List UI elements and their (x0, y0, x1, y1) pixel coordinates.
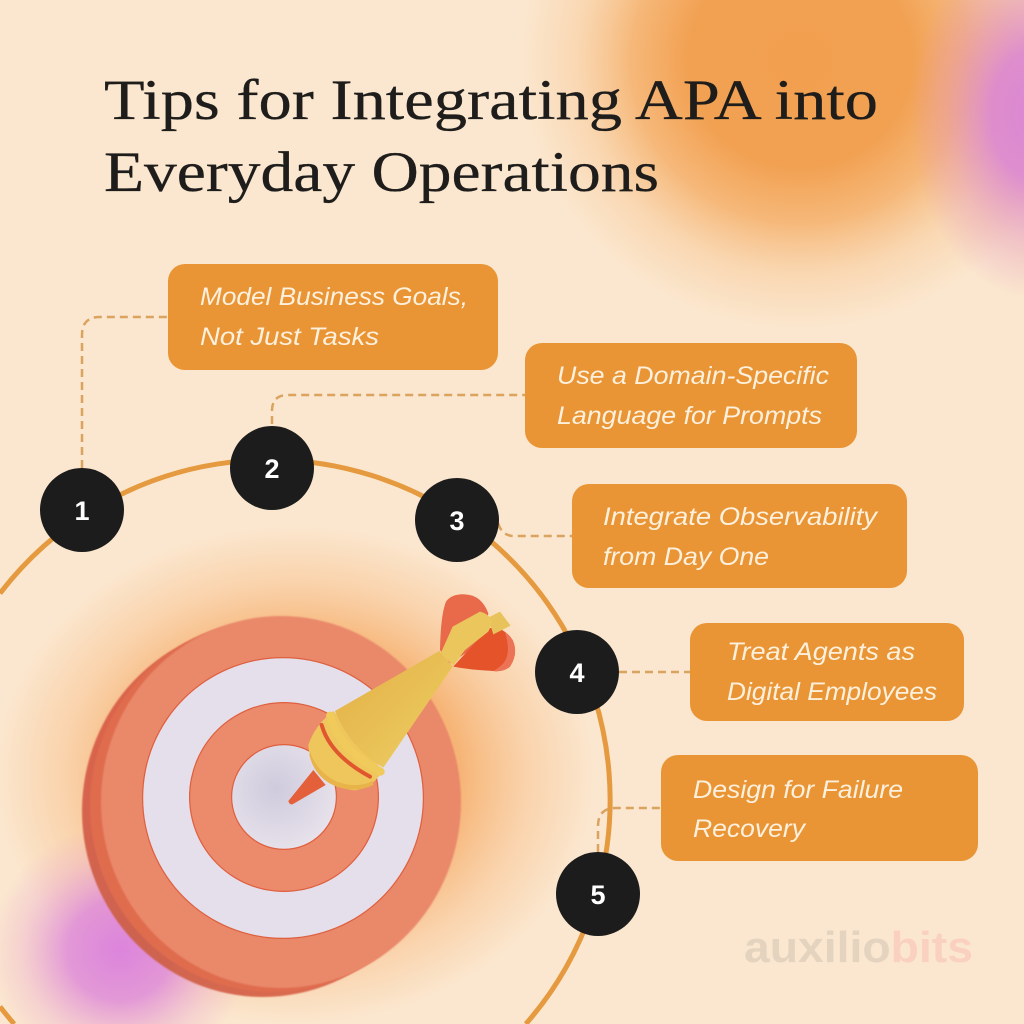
dashed connectors (82, 317, 690, 852)
panel: step 5: Recovery (693, 815, 807, 843)
badge 1: 1 (74, 496, 90, 526)
badge 2: 2 (264, 454, 280, 484)
panel: step 4: Digital Employees (727, 678, 937, 706)
title: Everyday Operations (104, 141, 659, 204)
panel: step 5: Design for Failure (693, 776, 903, 804)
badge 4: 4 (569, 658, 585, 688)
dartboard (82, 616, 461, 997)
watermark logo: auxiliobits (744, 923, 973, 972)
panel: step 2: Use a Domain-Specific (557, 362, 830, 390)
dart tip (288, 770, 326, 804)
badge 2 (230, 426, 314, 510)
step 4 (535, 623, 964, 721)
dart collar (308, 711, 383, 790)
panel: step 1: Model Business Goals, (200, 283, 468, 311)
title: Tips for Integrating APA into (104, 69, 878, 132)
step 1 (40, 264, 498, 552)
panel: step 2 (525, 343, 857, 448)
icon: dartboard with dart (82, 594, 515, 997)
dart right fin (453, 628, 515, 671)
panel: step 5 (661, 755, 978, 861)
panel: step 4 (690, 623, 964, 721)
dart collar band (330, 716, 381, 772)
panel: step 1: Not Just Tasks (200, 323, 379, 351)
badge 1 (40, 468, 124, 552)
panel: step 3: from Day One (603, 543, 769, 571)
step 2 (230, 343, 857, 510)
title (104, 69, 878, 204)
dart flight tab (488, 612, 511, 634)
badge 3: 3 (449, 506, 465, 536)
dart (288, 594, 515, 804)
badge 3 (415, 478, 499, 562)
panel: step 3 (572, 484, 907, 588)
badge 5: 5 (590, 880, 606, 910)
panel: step 1 (168, 264, 498, 370)
step 3 (415, 478, 907, 588)
badge 5 (556, 852, 640, 936)
dart cone (335, 651, 453, 768)
panel: step 3: Integrate Observability (603, 503, 879, 531)
panel: step 2: Language for Prompts (557, 402, 822, 430)
dart red stripe (322, 725, 370, 777)
ring around target (0, 460, 610, 1024)
dart flight block (441, 612, 493, 666)
badge 4 (535, 630, 619, 714)
panel: step 4: Treat Agents as (727, 638, 915, 666)
step 5 (556, 755, 978, 936)
dart top fin (440, 594, 488, 663)
